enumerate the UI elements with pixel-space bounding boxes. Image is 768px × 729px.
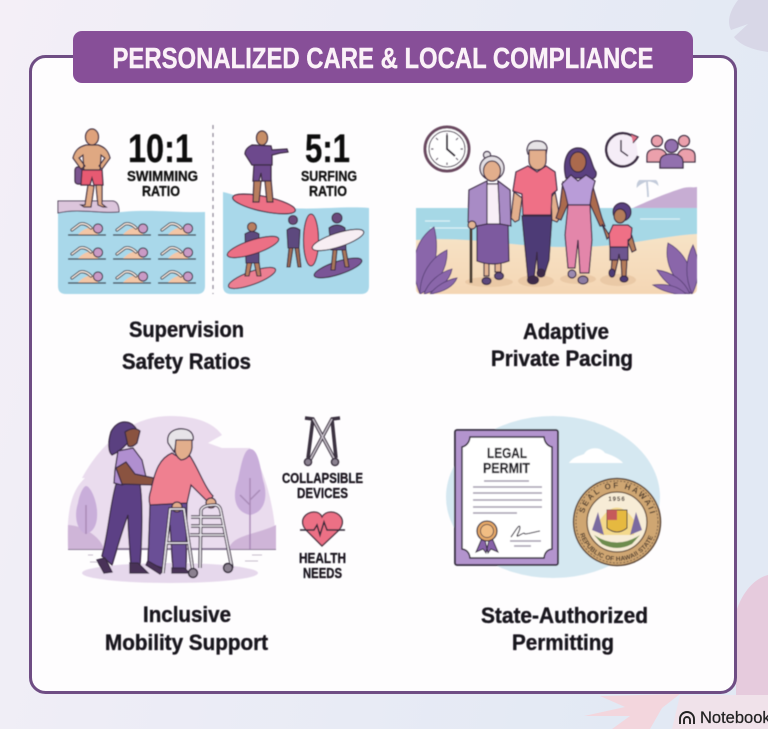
swimming water	[58, 211, 205, 294]
title banner	[73, 31, 693, 83]
icon: trees	[68, 449, 276, 562]
icon: flexible timing	[606, 133, 638, 166]
figure: elder with walker	[146, 429, 216, 574]
label: collapsible devices: DEVICES	[297, 486, 348, 502]
heading: state-authorized permitting: State-Authorized	[481, 603, 648, 628]
state seal: 1956	[608, 497, 626, 503]
stat: 5:1 surfing ratio: RATIO	[309, 183, 347, 200]
background blob	[68, 416, 276, 549]
stat: 10:1 swimming ratio: SWIMMING	[127, 168, 198, 185]
heading: supervision safety ratios: Safety Ratios	[122, 349, 251, 374]
title banner: PERSONALIZED CARE & LOCAL COMPLIANCE	[112, 43, 654, 75]
icon: lifeguard	[73, 129, 110, 207]
heading: inclusive mobility support: Inclusive	[143, 602, 231, 627]
stat: 10:1 swimming ratio: RATIO	[142, 183, 180, 200]
icon: left beach plant	[414, 227, 457, 294]
icon: surf instructor	[231, 131, 297, 218]
icon: heart with pulse	[300, 512, 345, 546]
pool ledge	[58, 201, 119, 213]
swimmers grid	[68, 224, 196, 283]
heading: adaptive private pacing: Private Pacing	[491, 346, 633, 371]
heading: inclusive mobility support: Mobility Support	[105, 630, 269, 655]
state seal: SEAL OF HAWAII	[578, 482, 656, 514]
heading: state-authorized permitting	[481, 603, 648, 655]
heading: supervision safety ratios: Supervision	[129, 317, 244, 342]
figure: mother	[556, 148, 605, 284]
label: health needs: HEALTH	[299, 551, 346, 567]
cloud	[569, 448, 623, 463]
surfing water	[223, 192, 369, 294]
heading: adaptive private pacing: Adaptive	[523, 319, 609, 344]
sky circle	[446, 416, 660, 578]
certificate	[455, 430, 558, 565]
icon: group of people	[647, 136, 695, 168]
panel: supervision safety ratios	[58, 125, 369, 374]
label: health needs: NEEDS	[303, 566, 342, 582]
label: health needs	[299, 551, 346, 582]
icon: walker frame	[163, 505, 232, 578]
panel: state-authorized permitting	[446, 416, 662, 656]
heading: state-authorized permitting: Permitting	[512, 630, 614, 655]
icon: collapsible walker	[304, 418, 340, 466]
state seal: REPUBLIC OF HAWAII STATE	[580, 532, 654, 562]
figure: caregiver	[97, 422, 154, 573]
stat: 10:1 swimming ratio: 10:1	[128, 127, 193, 171]
icon: surfers group	[225, 213, 366, 293]
label: collapsible devices	[282, 471, 363, 502]
stat: 5:1 surfing ratio	[301, 127, 357, 200]
state seal	[572, 477, 662, 568]
stat: 5:1 surfing ratio: 5:1	[305, 127, 350, 171]
panel: adaptive private pacing	[414, 127, 698, 371]
decorative fronds: bottom centre	[584, 694, 680, 729]
stat: 10:1 swimming ratio	[127, 127, 198, 200]
ground shadow	[82, 563, 258, 583]
heading: inclusive mobility support	[105, 602, 269, 655]
icon: clock	[425, 127, 469, 171]
figure: child	[602, 203, 636, 282]
heading: supervision safety ratios	[122, 317, 251, 374]
certificate: PERMIT	[483, 460, 530, 477]
decorative leaf: bottom right	[736, 575, 768, 700]
heading: adaptive private pacing	[491, 319, 633, 371]
figure: grandmother	[468, 152, 511, 284]
panel: inclusive mobility support	[68, 416, 363, 655]
certificate: LEGAL	[487, 445, 527, 462]
stat: 5:1 surfing ratio: SURFING	[301, 168, 357, 185]
label: collapsible devices: COLLAPSIBLE	[282, 471, 363, 487]
beach scene	[416, 177, 697, 294]
decorative wash: bottom right corner	[672, 695, 768, 729]
figure: grandfather	[511, 141, 560, 284]
decorative leaf: top right	[729, 0, 768, 52]
icon: right beach plant	[653, 243, 698, 294]
